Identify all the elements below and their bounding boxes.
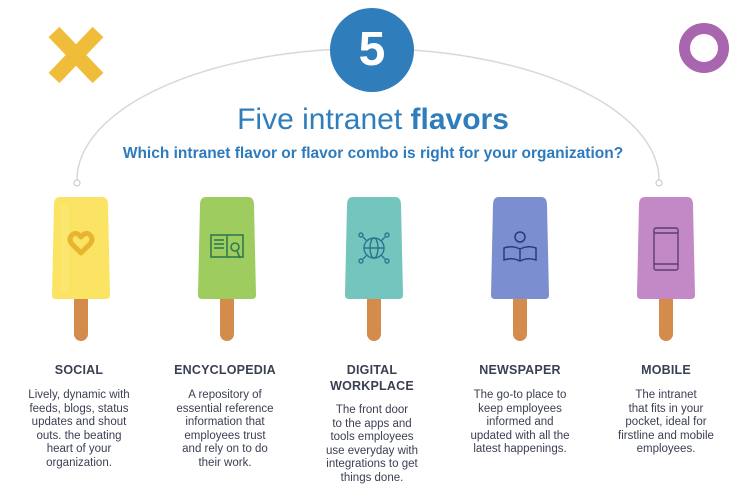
text: digital workplace: The front door xyxy=(336,404,408,416)
text: newspaper: informed and xyxy=(486,416,554,428)
icon: phone xyxy=(654,228,678,270)
text: newspaper xyxy=(470,389,570,455)
popsicle: digital workplace xyxy=(345,197,403,341)
text: mobile: that fits in your xyxy=(629,403,703,415)
popsicle: newspaper xyxy=(491,197,549,341)
text: social: organization. xyxy=(46,457,112,469)
text: social: Lively, dynamic with xyxy=(28,389,130,401)
text: encyclopedia: essential reference xyxy=(176,403,274,415)
text: social: heart of your xyxy=(47,443,111,455)
text: digital workplace: use everyday with xyxy=(326,445,418,457)
badge: number 5: 5 xyxy=(359,23,385,76)
icon: heart xyxy=(70,233,92,253)
text: encyclopedia xyxy=(176,389,274,469)
icon: yellow X xyxy=(48,26,104,84)
text: social xyxy=(28,389,130,469)
subtitle: Which intranet flavor or flavor combo is right for your organization? xyxy=(123,145,623,162)
text: encyclopedia: A repository of xyxy=(188,389,262,401)
heading: digital workplace: WORKPLACE xyxy=(330,379,414,393)
text: mobile: pocket, ideal for xyxy=(625,416,707,428)
popsicle: encyclopedia xyxy=(198,197,256,341)
popsicle: mobile xyxy=(637,197,695,341)
icon: book xyxy=(211,235,243,258)
text: encyclopedia: and rely on to do xyxy=(182,443,268,455)
heading: digital workplace: DIGITAL xyxy=(347,363,397,377)
text: newspaper: The go-to place to xyxy=(474,389,566,401)
text: social: updates and shout xyxy=(32,416,126,428)
text: social: outs. the beating xyxy=(36,430,122,442)
text: newspaper: keep employees xyxy=(478,403,562,415)
icon: reader xyxy=(504,232,536,261)
heading: encyclopedia: ENCYCLOPEDIA xyxy=(174,363,276,377)
heading: digital workplace xyxy=(330,363,414,393)
popsicle: social xyxy=(52,197,110,341)
text: mobile: firstline and mobile xyxy=(618,430,714,442)
text: newspaper: latest happenings. xyxy=(473,443,567,455)
text: mobile: The intranet xyxy=(635,389,697,401)
text: encyclopedia: employees trust xyxy=(184,430,266,442)
text: digital workplace: to the apps and xyxy=(332,418,412,430)
text: digital workplace xyxy=(326,404,418,484)
text: newspaper: updated with all the xyxy=(470,430,570,442)
heading: newspaper: NEWSPAPER xyxy=(479,363,561,377)
text: digital workplace: tools employees xyxy=(330,431,414,443)
heading: social: SOCIAL xyxy=(55,363,103,377)
text: digital workplace: things done. xyxy=(341,472,403,484)
icon: purple ring xyxy=(679,23,729,73)
title: Five intranet flavors xyxy=(237,103,509,136)
text: encyclopedia: information that xyxy=(185,416,265,428)
icon: globe network xyxy=(359,233,389,263)
text: mobile xyxy=(618,389,714,455)
text: social: feeds, blogs, status xyxy=(29,403,129,415)
badge: number 5 xyxy=(330,8,414,92)
text: encyclopedia: their work. xyxy=(198,457,252,469)
heading: mobile: MOBILE xyxy=(641,363,691,377)
text: digital workplace: integrations to get xyxy=(326,458,418,470)
text: mobile: employees. xyxy=(637,443,695,455)
